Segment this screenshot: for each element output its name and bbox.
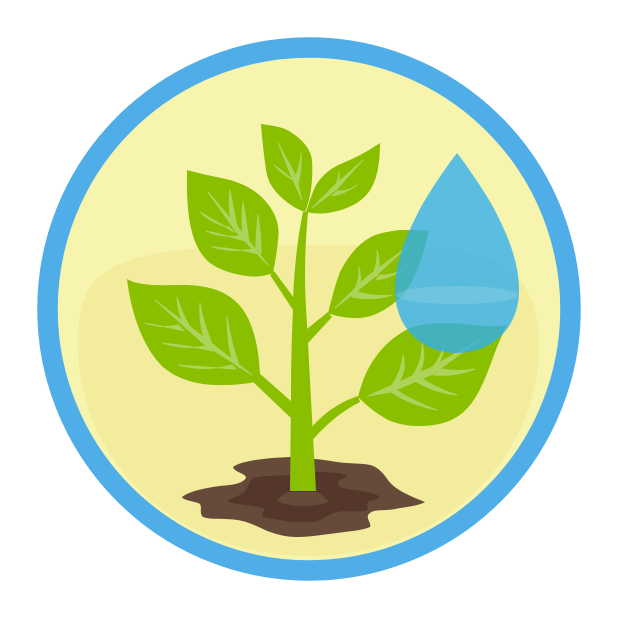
circular badge background [48, 48, 570, 570]
leaf: lower left [127, 279, 260, 385]
stem and branches [252, 212, 360, 491]
water drop highlight [396, 286, 518, 304]
leaf: middle right [328, 230, 429, 318]
leaf: top right [306, 143, 380, 214]
leaf: lower right [358, 323, 507, 426]
soil mound [182, 457, 425, 537]
water drop [395, 153, 519, 353]
leaf: middle left [187, 170, 279, 277]
plant [127, 124, 507, 506]
leaf: top left [261, 124, 312, 212]
soil mound around stem base [277, 492, 329, 506]
